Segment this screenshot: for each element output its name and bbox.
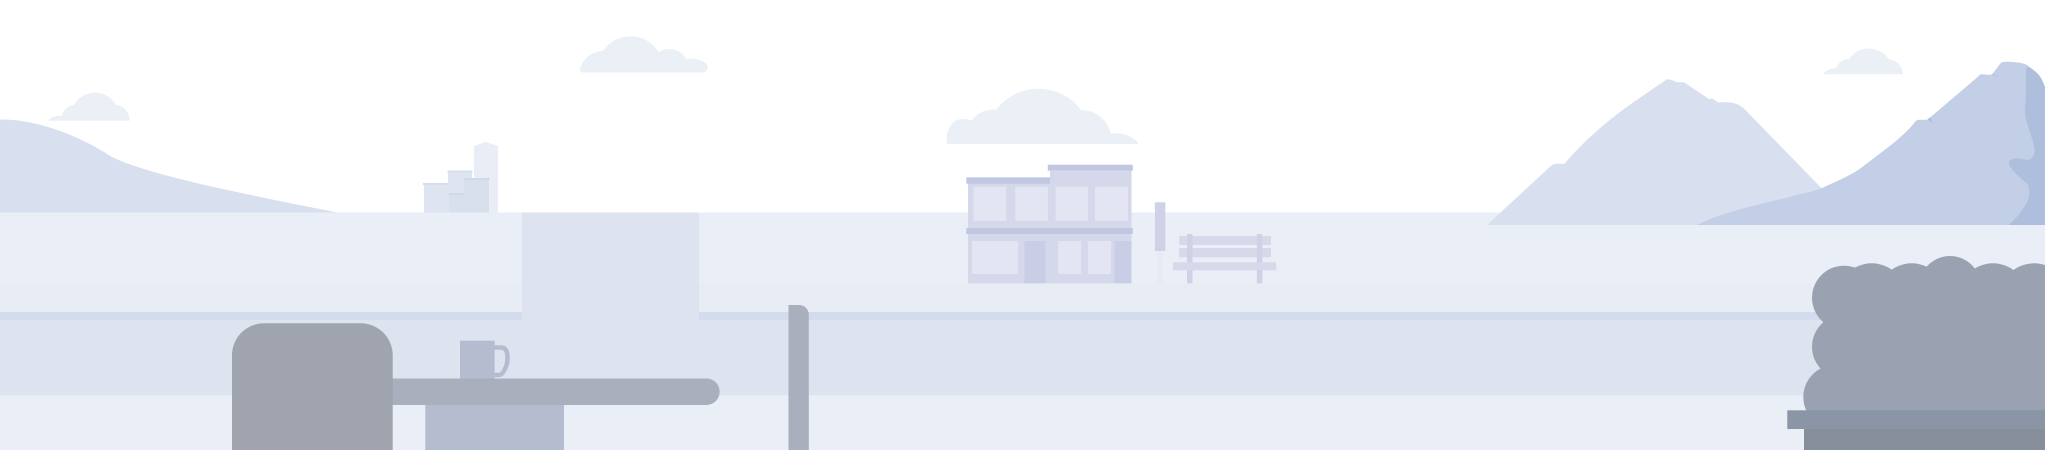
building: middle block — [448, 170, 472, 212]
window column — [522, 212, 699, 320]
mountain: front peak — [1697, 62, 2045, 225]
wall band — [0, 320, 2045, 396]
floor band — [0, 396, 2045, 450]
hill: left background — [0, 119, 337, 212]
ground band: near — [0, 283, 2045, 312]
mug — [460, 341, 508, 379]
table leg — [425, 405, 564, 450]
roof caps — [966, 165, 1133, 234]
building body — [968, 171, 1132, 283]
building: left block — [423, 183, 449, 212]
sign post — [1155, 202, 1165, 283]
small city skyline — [423, 142, 498, 212]
upper windows — [974, 187, 1128, 221]
ground band: far — [0, 212, 2045, 283]
cloud: right — [1823, 48, 1903, 74]
lamp pole — [788, 305, 809, 450]
bench — [1173, 234, 1276, 283]
building: front block — [449, 178, 490, 212]
building: shop — [966, 165, 1133, 283]
table top — [392, 378, 720, 405]
bush — [1803, 256, 2045, 429]
cloud: left small — [48, 93, 130, 121]
mountain shadow — [1927, 67, 2045, 225]
tower: tall — [474, 142, 498, 212]
mountain: rear light peak — [1487, 79, 1860, 225]
planter: rim — [1787, 410, 2045, 429]
chair — [232, 323, 393, 450]
lower windows — [972, 241, 1111, 274]
cloud: upper centre — [580, 36, 708, 72]
cloud: centre large — [947, 89, 1138, 144]
planter: base — [1804, 429, 2045, 450]
doors — [1024, 241, 1132, 283]
road edge strip — [0, 312, 2045, 320]
